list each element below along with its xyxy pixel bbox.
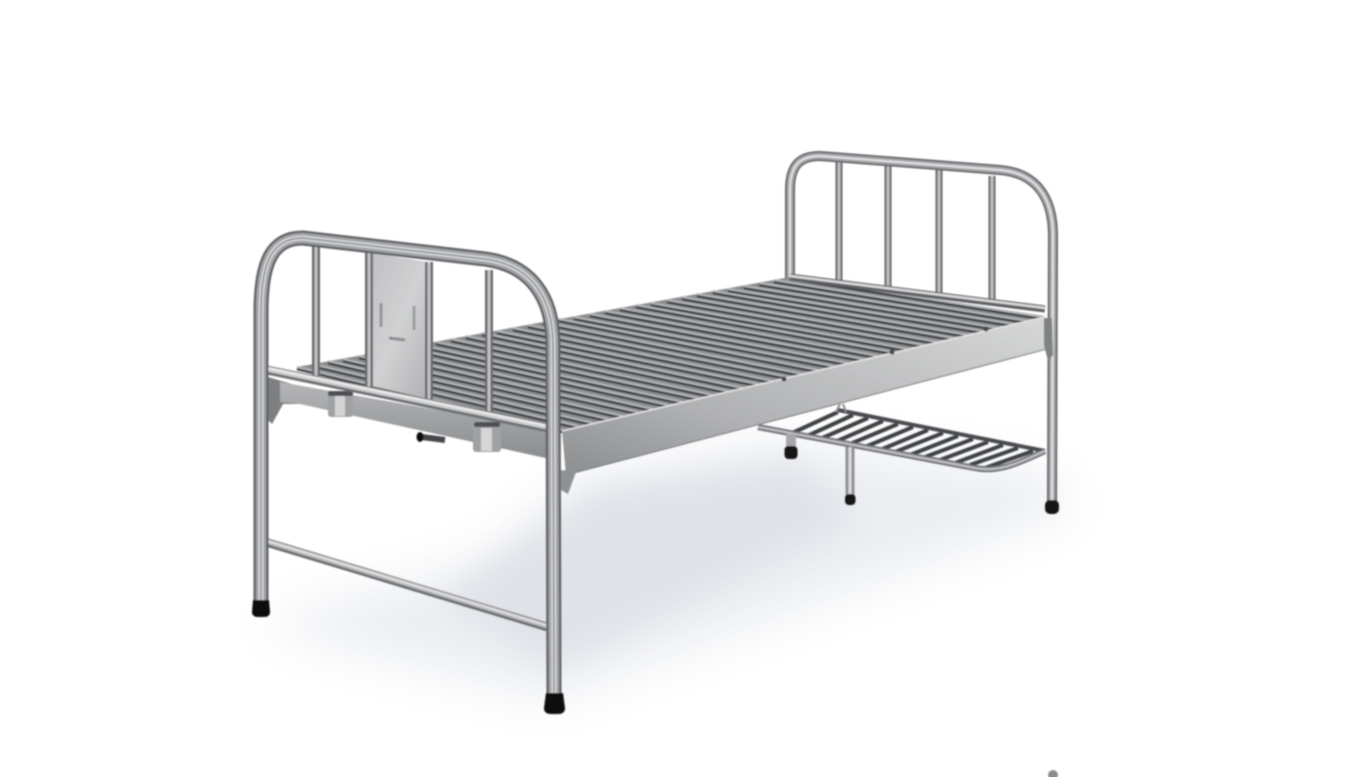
front headboard bbox=[252, 238, 565, 714]
rail mounting bolts bbox=[782, 326, 988, 382]
front cross rail bbox=[262, 367, 548, 428]
left socket bracket bbox=[328, 391, 353, 417]
foot shelf bbox=[758, 404, 1045, 469]
small object at bottom edge bbox=[1048, 770, 1058, 777]
shelf supports bbox=[836, 404, 846, 412]
rear legs bbox=[784, 434, 1059, 514]
rear middle leg bbox=[845, 447, 856, 505]
crank handle bbox=[416, 432, 445, 442]
back headboard bbox=[790, 156, 1053, 503]
right side bracket bbox=[1044, 318, 1053, 361]
rear left leg bbox=[784, 434, 798, 459]
shelf rear rail bbox=[838, 410, 1045, 451]
front left bracket bbox=[268, 377, 305, 424]
right socket bracket bbox=[473, 422, 501, 452]
front headboard bars bbox=[316, 244, 489, 412]
slatted bed deck bbox=[297, 276, 1045, 432]
deck slats bbox=[297, 279, 1043, 432]
back headboard frame tube bbox=[790, 156, 1053, 503]
front right bracket bbox=[561, 470, 576, 494]
bed structure bbox=[252, 156, 1059, 777]
front headboard frame tube bbox=[261, 238, 554, 697]
deck base bbox=[297, 277, 1045, 431]
front right foot bbox=[544, 693, 565, 714]
back headboard bars bbox=[839, 160, 992, 301]
rear right foot bbox=[1045, 500, 1059, 514]
long side rail bbox=[562, 317, 1047, 475]
floor shadow bbox=[255, 440, 1075, 700]
back rail of the deck bbox=[790, 276, 1045, 309]
chart card panel bbox=[369, 252, 431, 399]
front left foot bbox=[252, 600, 270, 617]
lower stretcher bar bbox=[262, 540, 547, 627]
shelf slats bbox=[790, 412, 1033, 468]
shelf outer tube bbox=[758, 427, 1045, 469]
front end beam bbox=[280, 382, 550, 459]
